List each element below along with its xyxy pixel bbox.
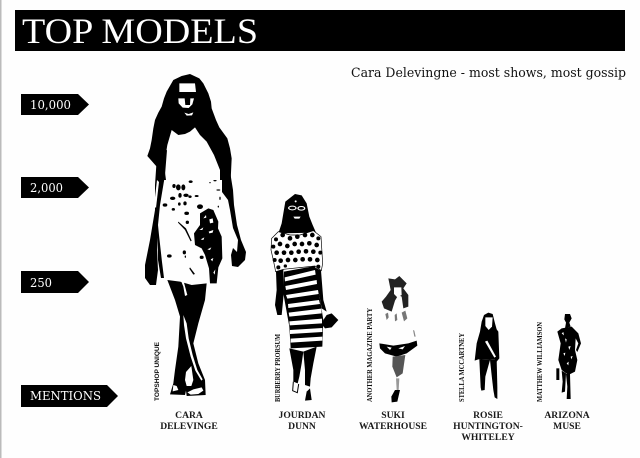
title banner: TOP MODELS xyxy=(22,11,258,51)
scale label: 2,000: 2,000 xyxy=(30,181,63,195)
scale label: 250: 250 xyxy=(30,276,52,290)
scale label: 10,000 xyxy=(21,94,89,115)
hair and jacket xyxy=(475,313,499,362)
scale label: 10,000: 10,000 xyxy=(30,98,71,112)
skirt xyxy=(379,341,417,357)
name: Jourdan Dunn: DUNN xyxy=(288,421,316,432)
name: Rosie Huntington-Whiteley xyxy=(453,410,523,443)
bag xyxy=(556,368,559,380)
name: Cara Delevinge: CARA xyxy=(175,410,203,421)
legs xyxy=(562,371,566,393)
dress xyxy=(557,327,581,375)
name: Arizona Muse xyxy=(544,410,590,432)
dress edge xyxy=(157,215,164,278)
name: Jourdan Dunn xyxy=(279,410,326,432)
legs xyxy=(479,359,490,391)
polka dot top xyxy=(271,231,323,272)
hair and face xyxy=(147,74,232,180)
legs and shoe xyxy=(392,355,405,377)
bag xyxy=(322,313,338,328)
name: Arizona Muse: ARIZONA xyxy=(544,410,590,421)
name: Cara Delevinge: DELEVINGE xyxy=(160,421,218,432)
source: Another Magazine Party: ANOTHER MAGAZINE PARTY xyxy=(367,308,374,402)
name: Suki Waterhouse: WATERHOUSE xyxy=(359,421,427,432)
subtitle: Cara Delevingne - most shows, most gossip xyxy=(351,66,626,81)
striped skirt xyxy=(283,266,323,348)
left arm xyxy=(145,150,167,285)
name: Arizona Muse: MUSE xyxy=(553,421,581,432)
hair and head xyxy=(278,194,316,233)
name: Rosie Huntington-Whiteley: ROSIE xyxy=(473,410,503,421)
arms xyxy=(275,269,284,315)
legs and shoes xyxy=(289,348,303,383)
name: Suki Waterhouse xyxy=(359,410,427,432)
source: Topshop Unique: TOPSHOP UNIQUE xyxy=(154,342,161,401)
scale label: mentions: MENTIONS xyxy=(30,389,101,403)
source: Matthew Williamson: MATTHEW WILLIAMSON xyxy=(537,322,544,402)
hair and head xyxy=(382,276,408,312)
name: Suki Waterhouse: SUKI xyxy=(381,410,405,421)
name: Rosie Huntington-Whiteley: HUNTINGTON- xyxy=(453,421,523,432)
right arm xyxy=(222,165,246,267)
title banner xyxy=(15,10,625,51)
model figure: Cara Delevingne xyxy=(145,74,246,396)
scale label: 2,000 xyxy=(21,177,89,198)
name: Jourdan Dunn: JOURDAN xyxy=(279,410,326,421)
model figure: Rosie Huntington-Whiteley xyxy=(475,313,499,399)
scale label: mentions xyxy=(21,385,118,407)
head xyxy=(564,314,572,328)
source: Burberry Prorsum: BURBERRY PRORSUM xyxy=(275,333,282,402)
model figure: Jourdan Dunn xyxy=(271,194,338,401)
name: Rosie Huntington-Whiteley: WHITELEY xyxy=(461,432,515,443)
legs and shoes xyxy=(167,280,207,396)
source: Stella McCartney: STELLA MCCARTNEY xyxy=(459,333,466,402)
name: Cara Delevinge xyxy=(160,410,218,432)
model figure: Arizona Muse xyxy=(556,314,581,399)
dress pattern xyxy=(163,180,229,283)
model figure: Suki Waterhouse xyxy=(379,276,417,402)
scale label: 250 xyxy=(21,271,89,293)
